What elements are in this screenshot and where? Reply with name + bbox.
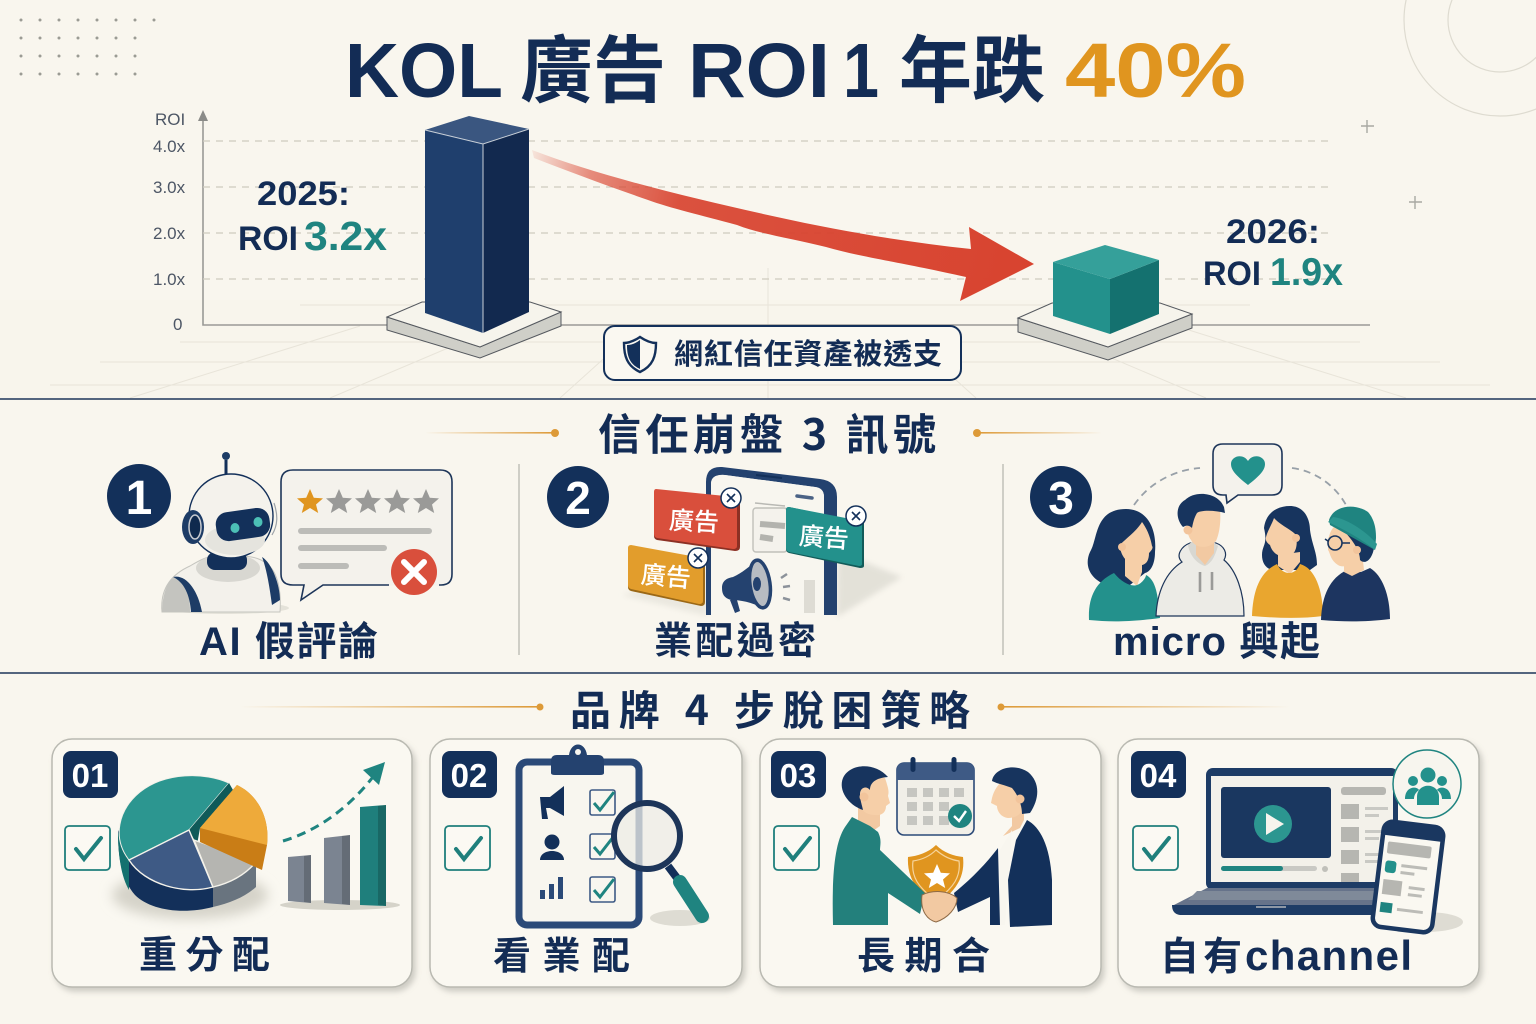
chart floor <box>0 268 1536 399</box>
ad: orange <box>628 545 708 606</box>
label: owned channel <box>1160 926 1412 982</box>
number 2 <box>547 466 609 528</box>
title: KOL <box>345 28 503 114</box>
icon: group of four people <box>1088 494 1390 621</box>
badge 03 <box>771 751 826 798</box>
checkbox <box>1133 826 1178 870</box>
label: owned channel: 自有 <box>1160 926 1242 982</box>
badge 04: 04 <box>1140 757 1177 794</box>
heading: four step strategy <box>240 677 1290 737</box>
icon: magnifying glass <box>614 803 710 926</box>
axis labels: 0 <box>173 315 182 334</box>
person 1 <box>1088 509 1160 621</box>
checkbox <box>445 826 490 870</box>
2025 label: ROI <box>238 220 298 258</box>
number 1: 1 <box>126 472 152 525</box>
axis labels: 2.0x <box>153 224 186 243</box>
axis labels: 1.0x <box>153 270 186 289</box>
callout: influencer trust overdrawn <box>604 326 961 380</box>
heading: four step strategy: 品牌 4 步脫困策略 <box>570 677 970 737</box>
title: ROI <box>688 28 830 114</box>
badge 02 <box>442 751 497 798</box>
section divider <box>0 398 1536 400</box>
label: micro rising: micro 興起 <box>1113 620 1320 664</box>
icon: calendar <box>897 757 974 835</box>
2026 label <box>1203 213 1343 294</box>
2025 label <box>238 175 387 259</box>
ad: red: 廣告 <box>668 501 720 539</box>
person 3 <box>1252 506 1323 618</box>
panel: step 01 reallocate <box>52 739 412 987</box>
panel: signal 3 micro influencers rise <box>1030 444 1390 664</box>
2026 label: 2026: <box>1226 213 1320 251</box>
badge 02: 02 <box>451 757 487 794</box>
2025 platform <box>387 302 561 358</box>
title: 年跌 <box>899 12 1045 118</box>
panel: signal 1 AI fake reviews <box>107 452 452 664</box>
person 2 <box>1156 494 1244 616</box>
section divider <box>0 672 1536 674</box>
phone <box>706 467 837 615</box>
label: long-term partnership: 長期合 <box>857 925 990 980</box>
title: 廣告 <box>520 12 666 118</box>
badge 01: 01 <box>72 757 108 794</box>
number 3: 3 <box>1048 472 1074 524</box>
decoration: dot grid <box>20 18 156 76</box>
label: too many sponsored posts: 業配過密 <box>654 610 816 665</box>
2025 bar <box>425 116 529 333</box>
icon: phone <box>1372 821 1463 933</box>
icon: phone with ad pop-ups <box>622 467 902 617</box>
2025 label: 2025: <box>257 175 350 213</box>
ad: teal: 廣告 <box>798 516 850 556</box>
panel: step 02 review sponsorships <box>430 739 742 987</box>
badge 04 <box>1131 751 1186 798</box>
icon: robot <box>161 452 289 614</box>
badge 01 <box>63 751 118 798</box>
partner right <box>954 767 1052 927</box>
label: owned channel: channel <box>1245 932 1412 979</box>
axis labels: ROI <box>155 110 185 129</box>
2026 label: ROI <box>1203 255 1261 293</box>
ad: teal <box>786 506 866 568</box>
icon: laptop with video <box>1172 768 1398 915</box>
title: 40% <box>1065 28 1246 114</box>
panel: step 04 owned channel <box>1118 739 1479 987</box>
callout: influencer trust overdrawn: 網紅信任資產被透支 <box>674 331 942 373</box>
panel: signal 2 too many sponsored posts <box>547 466 902 665</box>
2026 bar <box>1053 245 1159 334</box>
label: reallocate: 重分配 <box>139 924 270 979</box>
chart axes and gridlines <box>198 110 1370 325</box>
label: review sponsorships: 看業配 <box>493 925 630 980</box>
megaphone <box>722 559 773 613</box>
icon: pie chart <box>112 776 268 919</box>
2025 label: 3.2x <box>304 213 387 259</box>
axis labels: 4.0x <box>153 137 186 156</box>
number 2: 2 <box>565 472 591 524</box>
ad: orange: 廣告 <box>640 555 692 595</box>
axis labels: 3.0x <box>153 178 186 197</box>
panel: step 03 long-term partnership <box>760 739 1101 987</box>
badge 03: 03 <box>780 757 816 794</box>
bar chart: ROI 2025 vs 2026 <box>153 110 1370 360</box>
number 3 <box>1030 466 1092 528</box>
partner left <box>833 766 925 925</box>
heading: three trust signals <box>425 401 1102 463</box>
checkbox <box>65 826 110 870</box>
icon: shield <box>624 337 656 372</box>
icon: rising bars with arrow <box>280 762 400 910</box>
person 4 <box>1321 507 1390 621</box>
decoration: corner arcs and plus marks <box>1361 0 1536 209</box>
number 1 <box>107 464 171 528</box>
label: AI fake reviews: AI 假評論 <box>199 620 378 664</box>
icon: heart speech bubble <box>1134 444 1346 505</box>
checkbox <box>774 826 819 870</box>
2026 label: 1.9x <box>1270 251 1343 294</box>
icon: fake review bubble <box>281 470 452 600</box>
axis labels <box>153 110 186 334</box>
ad: red <box>654 488 741 551</box>
icon: community circle <box>1393 750 1461 818</box>
2026 platform <box>1018 303 1192 360</box>
icon: trust shield <box>908 845 963 905</box>
arrow: decline <box>532 150 1034 301</box>
title <box>345 12 1246 118</box>
icon: clipboard checklist <box>519 744 639 925</box>
heading: three trust signals: 信任崩盤 3 訊號 <box>598 401 936 463</box>
title: 1 <box>843 28 879 114</box>
icon: handshake partners <box>833 766 1052 927</box>
